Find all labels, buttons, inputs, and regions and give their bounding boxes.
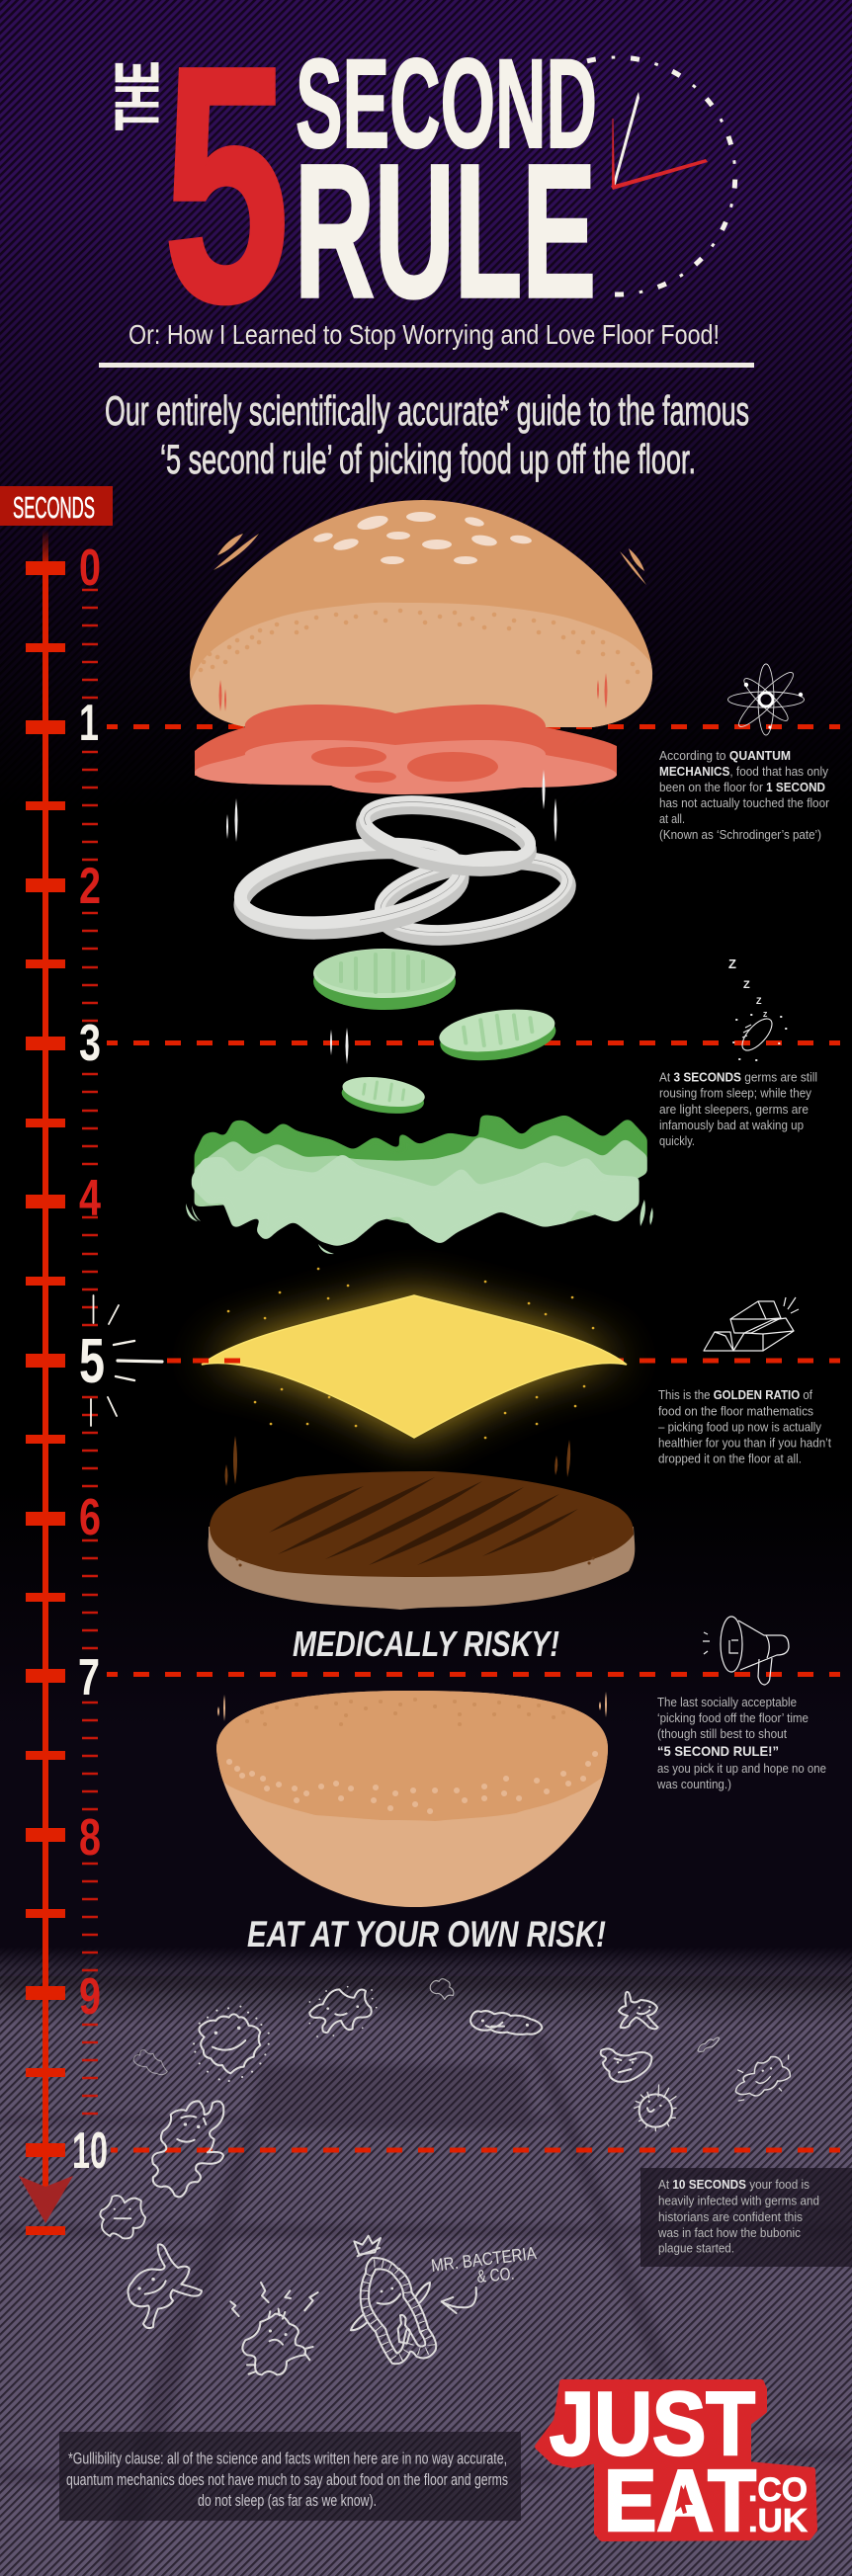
onion ring top (359, 790, 535, 879)
text: 1 second (659, 749, 829, 842)
second numbers: 3 (79, 1015, 101, 1072)
floor shading (0, 1976, 852, 2576)
cucumber motion lines (330, 1028, 348, 1064)
lettuce motion lines (186, 1200, 653, 1254)
patty motion lines (225, 1436, 570, 1486)
title numeral: 5: 5 (163, 0, 290, 373)
callout: gullibility clause: quantum mechanics does not have much to say about food on the floor and germs (66, 2470, 508, 2489)
text: 7 seconds: ‘picking food off the floor’ time (657, 1711, 809, 1725)
text: 3 seconds: rousing from sleep; while they (659, 1087, 812, 1101)
text: 3 seconds (659, 1071, 817, 1148)
callout: gullibility clause (59, 2432, 521, 2521)
text: 1 second: been on the floor for 1 SECOND (659, 781, 825, 794)
label: mr bacteria and co (430, 2243, 538, 2286)
title (104, 0, 597, 373)
germ: long arm (128, 2244, 202, 2328)
germs lower cluster (128, 2236, 476, 2374)
title rule (99, 363, 754, 368)
germ: small square mouth (100, 2196, 145, 2238)
text: 5 seconds (658, 1388, 831, 1466)
callout: 10 seconds: heavily infected with germs and (658, 2194, 819, 2207)
second numbers: 8 (79, 1809, 101, 1867)
text: 7 seconds (656, 1696, 826, 1791)
label: mr bacteria and co: & CO. (476, 2264, 515, 2286)
cucumber slice three (340, 1072, 427, 1119)
minor ticks (82, 590, 98, 2114)
subtitle: Or: How I Learned to Stop Worrying and Love Floor Food! (128, 319, 720, 350)
text: 5 seconds: – picking food up now is actually (658, 1421, 822, 1435)
bun motion lines (217, 1692, 607, 1721)
cheese (193, 1269, 627, 1438)
five burst lines (91, 1295, 162, 1426)
logo words: EAT (604, 2451, 756, 2549)
text: 1 second: has not actually touched the floor (659, 796, 829, 810)
second numbers (72, 540, 108, 2180)
second numbers: 9 (79, 1968, 101, 2026)
germ: waving (619, 1992, 658, 2029)
bun light specks (229, 1754, 595, 1811)
text: 5 seconds: This is the GOLDEN RATIO of (658, 1388, 812, 1402)
germ: tiny top (430, 1979, 454, 1999)
callout: gullibility clause: do not sleep (as far as we know). (198, 2491, 377, 2510)
germ: large (152, 2101, 223, 2197)
callout: 10 seconds: plague started. (658, 2241, 734, 2255)
icon: sleeping germ: Z (756, 996, 762, 1006)
title word: second: SECOND (296, 34, 597, 175)
second numbers: 2 (79, 858, 101, 915)
bun dark specks (247, 1700, 563, 1724)
icon: sleeping germ: Z (728, 956, 736, 971)
text: 3 seconds: quickly. (659, 1134, 695, 1148)
icon: clock (587, 57, 735, 294)
germs right cluster (470, 1992, 790, 2131)
pointing arrow (442, 2287, 476, 2313)
second numbers: 4 (79, 1170, 101, 1227)
cheese slice (202, 1295, 627, 1438)
callout: 10 seconds: was in fact how the bubonic (657, 2226, 801, 2240)
second numbers: 0 (79, 540, 101, 597)
top bun (188, 500, 654, 731)
onion rings (235, 790, 574, 951)
text: 3 seconds: At 3 SECONDS germs are still (659, 1071, 817, 1085)
germ: splat right (735, 2055, 790, 2101)
second numbers: 6 (79, 1489, 101, 1546)
germ: splat frown (309, 1987, 377, 2036)
logo words: JUST (550, 2374, 755, 2474)
text: 1 second: (Known as ‘Schrodinger’s pate’) (659, 828, 821, 842)
logo words: .UK (748, 2502, 808, 2538)
onion ring right (375, 844, 574, 951)
callout: 10 seconds (640, 2168, 852, 2267)
germ: zapped (230, 2283, 318, 2374)
germs (100, 1979, 790, 2374)
second numbers: 7 (78, 1649, 100, 1706)
label: mr bacteria and co: MR. BACTERIA (430, 2243, 538, 2276)
cucumber slices (313, 949, 558, 1119)
bottom bun (208, 1680, 618, 1907)
second numbers: 10 (72, 2122, 108, 2180)
callout: gullibility clause: *Gullibility clause: all of the science and facts written here are in no way accurate, (68, 2449, 507, 2468)
text: 1 second: According to QUANTUM (659, 749, 791, 763)
text: 7 seconds: (though still best to shout (657, 1727, 787, 1741)
bun red accents (219, 673, 607, 711)
logo cursor (675, 2485, 693, 2514)
icon: megaphone (703, 1617, 789, 1685)
seconds tag: SECONDS (13, 490, 95, 525)
text: 7 seconds: was counting.) (656, 1778, 731, 1791)
text: 1 second: at all. (659, 812, 685, 826)
bun motion lines (213, 534, 646, 585)
dashes over cheese (193, 1358, 240, 1364)
onion ring left (235, 832, 467, 944)
germ: kidney (601, 2048, 651, 2082)
germ: tiny right (698, 2037, 720, 2051)
second numbers: 1 (79, 695, 99, 752)
arrow (19, 2176, 73, 2223)
germ: cloud (470, 2011, 542, 2035)
ruler axis (43, 530, 48, 2189)
germ: mr bacteria (351, 2236, 476, 2364)
label: medically risky: MEDICALLY RISKY! (293, 1623, 559, 1664)
patty (208, 1436, 635, 1610)
text: 3 seconds: are light sleepers, germs are (659, 1103, 809, 1117)
germ: faint small (133, 2050, 167, 2075)
callout: 10 seconds: At 10 SECONDS your food is (658, 2178, 809, 2192)
logo: just eat (538, 2374, 814, 2549)
text: 5 seconds: dropped it on the floor at all. (658, 1453, 802, 1466)
lettuce (192, 1115, 646, 1246)
ruler (0, 486, 113, 2235)
grill marks (269, 1477, 578, 1565)
icon: sleeping germ (728, 956, 787, 1060)
intro text (105, 387, 749, 482)
text: 1 second: MECHANICS, food that has only (659, 765, 829, 779)
cucumber slice two (437, 1003, 558, 1067)
germs left cluster (133, 1987, 377, 2197)
icon: gold bars (704, 1297, 799, 1351)
text: 5 seconds: food on the floor mathematics (658, 1405, 813, 1419)
title word: rule: RULE (295, 125, 596, 337)
seconds tag (0, 486, 113, 526)
crown (354, 2236, 381, 2256)
onion motion lines (226, 770, 557, 842)
icon: sleeping germ: Z (743, 979, 750, 991)
logo backing (538, 2382, 814, 2538)
text: 3 seconds: infamously bad at waking up (659, 1119, 804, 1132)
cheese glow (202, 1295, 627, 1438)
second numbers: 5 (79, 1325, 105, 1396)
germ: sun small (635, 2085, 676, 2131)
callout: 10 seconds: historians are confident this (658, 2210, 803, 2224)
icon: sleeping germ: Z (763, 1012, 768, 1019)
text: 5 seconds: healthier for you than if you hadn’t (658, 1437, 831, 1451)
major ticks (26, 561, 65, 2235)
tomato (195, 705, 617, 794)
logo words: .CO (748, 2471, 808, 2509)
label: eat at your own risk: EAT AT YOUR OWN RISK! (247, 1914, 606, 1954)
germ: sun smile (194, 2007, 269, 2081)
icon: atom (727, 664, 805, 735)
sparkles (228, 1269, 593, 1438)
text: 7 seconds: as you pick it up and hope no one (657, 1762, 826, 1776)
sesame seeds (312, 512, 532, 564)
logo words (550, 2374, 808, 2549)
cucumber slice one (313, 949, 456, 1010)
text: 7 seconds: “5 SECOND RULE!” (657, 1743, 779, 1759)
dashed second lines (107, 727, 840, 2150)
title word: the: THE (104, 61, 172, 130)
text: 7 seconds: The last socially acceptable (657, 1696, 797, 1709)
